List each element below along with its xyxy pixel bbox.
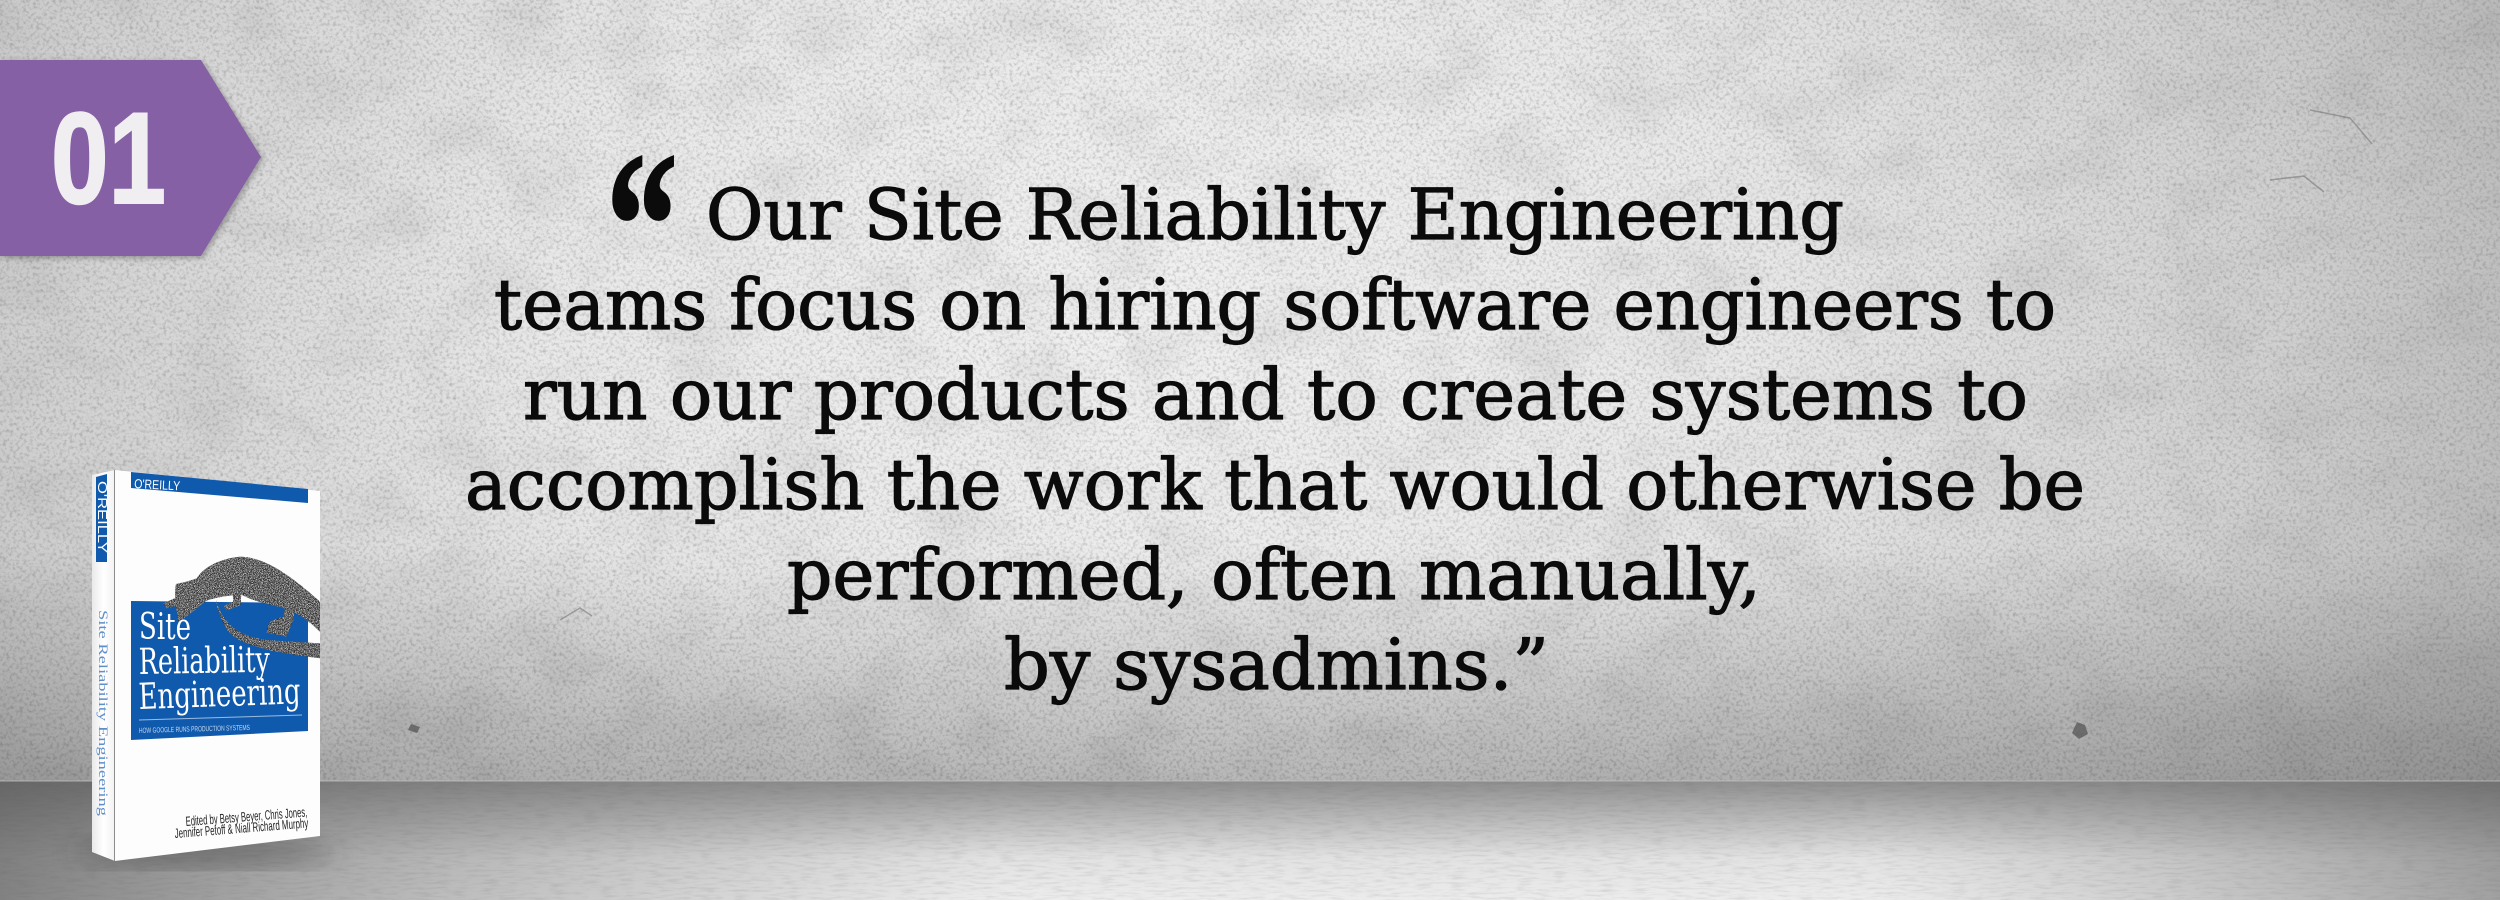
cover top band	[131, 472, 308, 503]
quote line 3: run our products and to create systems to	[523, 354, 2028, 436]
cover authors: Edited by Betsy Beyer, Chris Jones,	[185, 804, 308, 829]
quote line 5: performed, often manually,	[787, 534, 1761, 616]
badge: number 01: 01	[51, 85, 166, 231]
cover title block: Reliability	[138, 640, 271, 683]
quote line 1: Our Site Reliability Engineering	[706, 174, 1844, 256]
book spine: O'REILLY	[95, 481, 110, 553]
book spine: Site Reliability Engineering	[96, 610, 111, 817]
illustration: lizard	[163, 557, 320, 658]
cover title block: Engineering	[138, 671, 301, 718]
cover top band: O'REILLY	[134, 476, 181, 493]
cover title block: HOW GOOGLE RUNS PRODUCTION SYSTEMS	[139, 723, 250, 735]
cover title block	[131, 601, 308, 740]
badge: number 01	[0, 60, 261, 256]
quote line 4: accomplish the work that would otherwise be	[465, 444, 2085, 526]
book spine	[92, 470, 116, 861]
icon: opening quotation mark: “	[606, 110, 678, 342]
cover title block: Site	[139, 607, 191, 648]
quote line 6: by sysadmins.”	[1004, 624, 1549, 706]
quote line 2: teams focus on hiring software engineers to	[494, 264, 2056, 346]
background: concrete floor	[0, 780, 2500, 900]
book: Site Reliability Engineering	[75, 470, 335, 864]
cover authors: Jennifer Petoff & Niall Richard Murphy	[174, 816, 309, 841]
book cover	[115, 470, 320, 861]
quote text	[465, 110, 2085, 706]
cover authors	[174, 804, 309, 841]
